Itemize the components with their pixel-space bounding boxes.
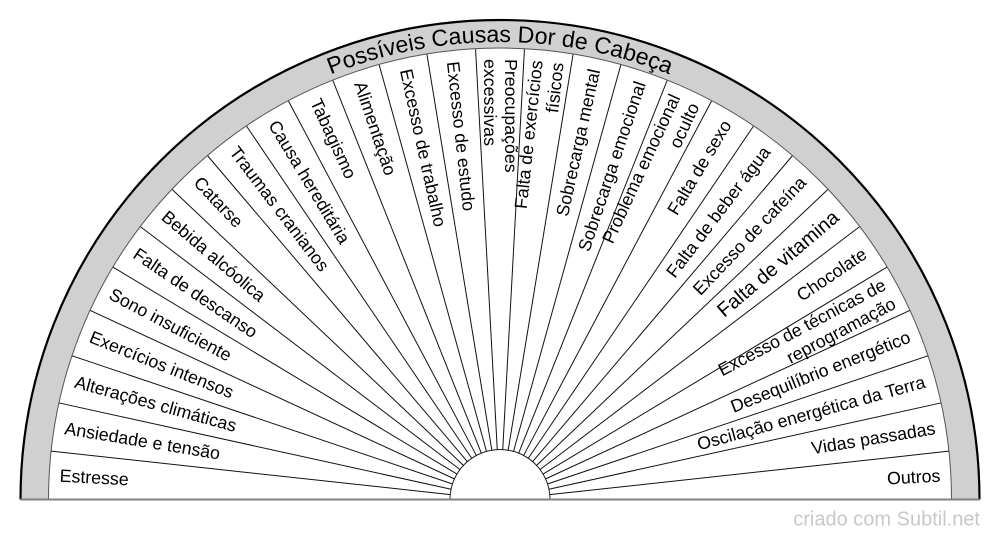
label: Excesso de cafeína: Excesso de cafeína (689, 173, 810, 299)
label: Falta de exercícios físicos: Falta de exercícios (511, 59, 547, 210)
label: Falta de exercícios físicos: físicos (542, 61, 568, 114)
label: Excesso de estudo: Excesso de estudo (443, 60, 479, 212)
label: Preocupações excessivas: Preocupações (501, 59, 521, 173)
label: Estresse: Estresse (59, 466, 129, 489)
label: Falta de sexo: Falta de sexo (663, 117, 736, 218)
label: Vidas passadas: Vidas passadas (810, 418, 937, 458)
label: Ansiedade e tensão: Ansiedade e tensão (63, 418, 222, 463)
label: Tabagismo: Tabagismo (306, 95, 361, 182)
label: Oscilação energética da Terra: Oscilação energética da Terra (695, 372, 928, 454)
hub arc (450, 450, 550, 500)
label: Causa hereditária: Causa hereditária (265, 117, 354, 247)
radial dividers (51, 49, 949, 495)
label: Preocupações excessivas: excessivas (480, 59, 500, 146)
label: Problema emocional oculto: oculto (665, 100, 703, 151)
label: Bebida alcóolica: Bebida alcóolica (158, 206, 269, 306)
label: Alimentação: Alimentação (350, 79, 400, 178)
label: Falta de descanso: Falta de descanso (130, 244, 261, 342)
label: Excesso de trabalho: Excesso de trabalho (396, 67, 450, 229)
label: Excesso de técnicas de reprogramação: reprogramação (783, 293, 899, 368)
label: Sobrecarga mental: Sobrecarga mental (552, 67, 604, 218)
watermark: criado com Subtil.net (793, 508, 980, 530)
label: Sobrecarga emocional: Sobrecarga emocional (574, 79, 650, 254)
label: Catarse: Catarse (190, 173, 247, 232)
label: Excesso de técnicas de reprogramação: Excesso de técnicas de (715, 275, 889, 380)
labels: left half (59, 59, 521, 489)
title: Possíveis Causas Dor de Cabeça (326, 26, 671, 74)
baseline (20, 498, 980, 500)
label: Traumas cranianos: Traumas cranianos (226, 143, 333, 275)
label: Falta de beber água: Falta de beber água (662, 142, 775, 281)
label: Sono insuficiente: Sono insuficiente (106, 284, 235, 365)
label: Desequilíbrio energético: Desequilíbrio energético (728, 327, 913, 417)
labels: right half (511, 59, 941, 489)
label: Alterações climáticas: Alterações climáticas (73, 372, 239, 436)
label: Chocolate: Chocolate (793, 244, 870, 305)
label: Falta de vitamina: Falta de vitamina (713, 206, 844, 322)
label: Exercícios intensos: Exercícios intensos (87, 327, 237, 402)
label: Outros: Outros (886, 466, 941, 489)
label: Problema emocional oculto: Problema emocional (598, 91, 684, 246)
